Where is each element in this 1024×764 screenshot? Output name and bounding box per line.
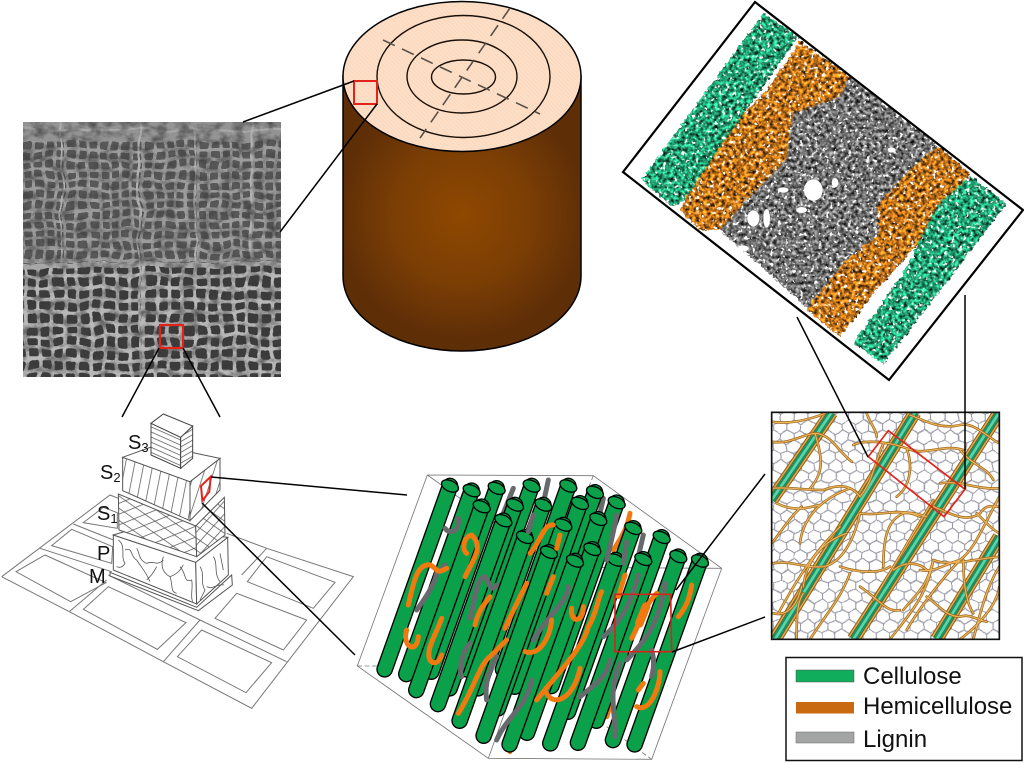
red selection quad (868, 431, 965, 517)
legend: hemicellulose: Hemicellulose (863, 693, 1012, 720)
leader lines: bundle to network (672, 474, 765, 652)
layer S3 (151, 414, 193, 468)
layer labels: 1 (110, 511, 118, 526)
micrograph of wood cells (23, 122, 281, 377)
molecular network panel (765, 406, 1006, 646)
growth rings (377, 16, 550, 138)
layer labels: 2 (113, 470, 121, 485)
hemicellulose curves (772, 413, 999, 639)
legend: cellulose (796, 663, 962, 690)
leader lines: micrograph to cell wall (122, 348, 220, 417)
red square on micrograph (160, 325, 183, 348)
layer labels: 3 (141, 440, 149, 455)
molecular dynamics panel (623, 2, 1023, 380)
micrograph shading (23, 122, 281, 377)
layer P (113, 527, 228, 604)
back strands (487, 480, 643, 752)
legend: lignin (796, 726, 927, 753)
layer labels (89, 432, 149, 588)
layer S2 (123, 445, 220, 521)
red square on log (354, 81, 377, 104)
bounding box (357, 475, 722, 759)
lignin strands (417, 515, 665, 740)
molecular panel frame (623, 2, 1023, 380)
layer labels: S (100, 462, 113, 484)
legend: hemicellulose (796, 693, 1012, 720)
hemicellulose strands (406, 525, 692, 713)
cellulose cylinders (385, 477, 710, 744)
red marker on S2 (201, 477, 211, 501)
leader lines: log to micrograph (243, 81, 377, 232)
legend (786, 658, 1022, 760)
log cross section (343, 2, 581, 351)
network frame (772, 412, 999, 639)
layer labels: P (97, 543, 110, 565)
fibril bundle (357, 475, 722, 759)
molecular layers (642, 13, 1007, 363)
layer S1 (118, 494, 225, 557)
lignin mesh (772, 413, 998, 638)
cellulose fibres (772, 412, 999, 639)
base grid (2, 495, 353, 708)
dashed axes (383, 8, 540, 138)
leader lines: S2 to fibril bundle (202, 477, 407, 655)
voids in the lignin layer (738, 147, 896, 251)
legend: cellulose: Cellulose (863, 663, 962, 690)
legend: lignin: Lignin (863, 726, 927, 753)
red selection box (615, 594, 672, 652)
layer M (110, 572, 232, 611)
layer labels: M (89, 566, 106, 588)
leader lines: network to molecular panel (797, 295, 965, 489)
log top face (343, 2, 581, 152)
cell wall layers diagram (2, 414, 353, 708)
layer labels: S (128, 432, 141, 454)
layer labels: S (97, 503, 110, 525)
log body (343, 76, 581, 351)
